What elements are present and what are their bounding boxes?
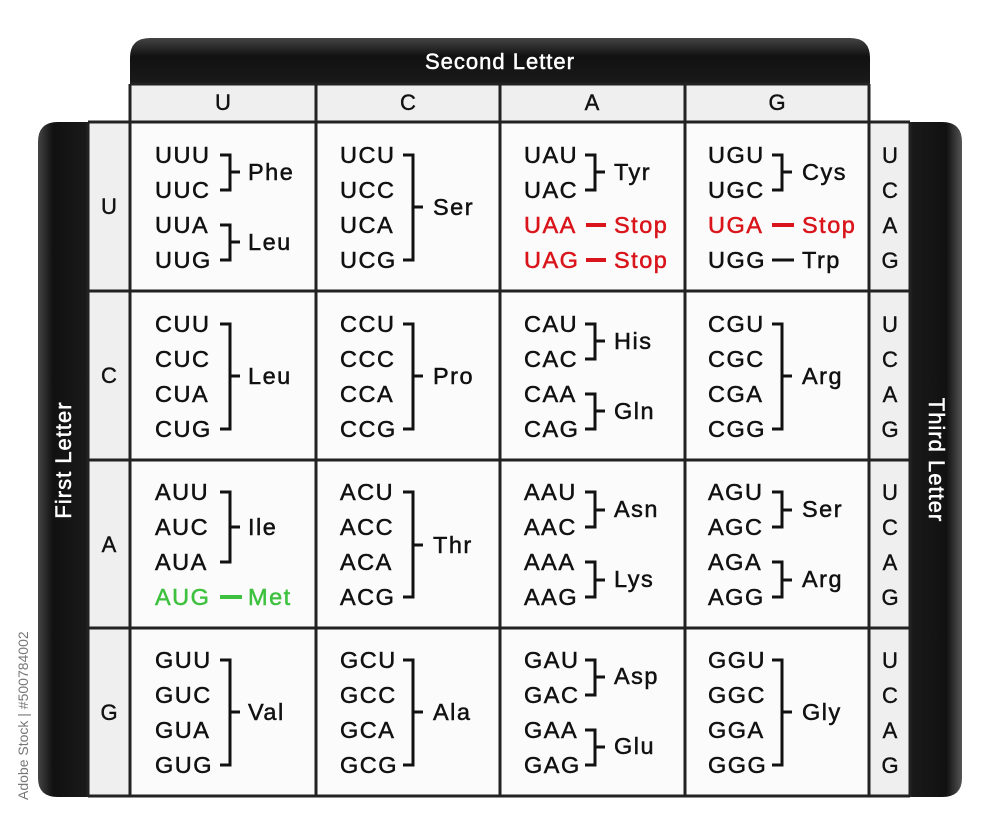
- cell UA: UAG: [524, 247, 579, 273]
- cell GA: GAG: [524, 752, 581, 778]
- cell UU: Leu: [248, 229, 292, 255]
- cell AA: Lys: [614, 566, 654, 592]
- cell AG: AGA: [708, 549, 762, 575]
- cell AC: ACA: [340, 549, 393, 575]
- cell UG: UGU: [708, 142, 765, 168]
- cell CG: CGA: [708, 381, 763, 407]
- cell CA: [524, 311, 655, 442]
- cell GG: GGA: [708, 717, 765, 743]
- grid backgrounds: [88, 84, 910, 797]
- right bar: Third Letter: [910, 122, 962, 797]
- cell AU: AUA: [155, 549, 208, 575]
- second letter headers: A: [585, 90, 600, 115]
- cell UU: [155, 142, 294, 273]
- cell UU: UUG: [155, 247, 212, 273]
- first letter labels: U: [101, 194, 117, 219]
- cell UU: Phe: [248, 159, 294, 185]
- cell GA: Asp: [614, 663, 659, 689]
- third letter labels: G: [881, 248, 899, 273]
- cell CU: [155, 311, 292, 442]
- third letter labels: U: [882, 648, 898, 673]
- second letter headers: U: [215, 90, 231, 115]
- cell GU: Val: [248, 699, 285, 725]
- cell CG: CGU: [708, 311, 765, 337]
- cell CA: CAC: [524, 346, 578, 372]
- cell AC: ACU: [340, 479, 394, 505]
- cell UC: Ser: [433, 194, 474, 220]
- cell GC: GCC: [340, 682, 397, 708]
- third letter labels: C: [882, 347, 898, 372]
- cell GU: GUU: [155, 647, 212, 673]
- cell AA: Asn: [614, 496, 659, 522]
- cell UC: UCA: [340, 212, 394, 238]
- cell AU: AUU: [155, 479, 209, 505]
- cell GG: GGG: [708, 752, 767, 778]
- third letter labels: C: [882, 178, 898, 203]
- cell AA: AAA: [524, 549, 576, 575]
- cell GU: GUA: [155, 717, 210, 743]
- cell UA: UAC: [524, 177, 578, 203]
- first letter labels: C: [101, 363, 117, 388]
- cell UU: UUC: [155, 177, 210, 203]
- cell CG: [708, 311, 843, 442]
- cell AU: AUG: [155, 584, 210, 610]
- third letter labels: G: [881, 585, 899, 610]
- third letter labels: U: [882, 480, 898, 505]
- third letter labels: C: [882, 683, 898, 708]
- second letter headers: G: [768, 90, 786, 115]
- cell CA: CAG: [524, 416, 579, 442]
- cell UC: UCU: [340, 142, 395, 168]
- cell CC: CCC: [340, 346, 395, 372]
- cell UA: [524, 142, 668, 273]
- first letter labels: [100, 194, 118, 725]
- third letter labels: A: [883, 213, 898, 238]
- cell AA: [524, 479, 659, 610]
- cell UC: UCC: [340, 177, 395, 203]
- cell AA: AAC: [524, 514, 577, 540]
- cell CU: CUU: [155, 311, 210, 337]
- cell UA: UAU: [524, 142, 578, 168]
- cell AC: ACC: [340, 514, 394, 540]
- cell CU: CUA: [155, 381, 209, 407]
- cell AG: Arg: [802, 566, 843, 592]
- cell GU: GUG: [155, 752, 213, 778]
- cell GC: GCU: [340, 647, 397, 673]
- cell AC: ACG: [340, 584, 395, 610]
- cell AG: AGC: [708, 514, 763, 540]
- cell AU: Met: [248, 584, 292, 610]
- cell UU: UUU: [155, 142, 210, 168]
- cell GC: [340, 647, 471, 778]
- cell CU: CUC: [155, 346, 210, 372]
- cell GG: GGU: [708, 647, 766, 673]
- left bar: First Letter: [38, 122, 88, 797]
- cell AG: AGU: [708, 479, 763, 505]
- cell GG: GGC: [708, 682, 766, 708]
- third letter labels: C: [882, 515, 898, 540]
- cell CU: Leu: [248, 363, 292, 389]
- cell AC: Thr: [433, 532, 473, 558]
- third letter labels: U: [882, 143, 898, 168]
- cell GC: GCA: [340, 717, 395, 743]
- cell UA: UAA: [524, 212, 577, 238]
- cell UU: UUA: [155, 212, 209, 238]
- cell GG: Gly: [802, 699, 842, 725]
- cell AU: [155, 479, 292, 610]
- cell AG: [708, 479, 843, 610]
- header bar: Second Letter: [130, 38, 870, 84]
- cell GG: [708, 647, 842, 778]
- cell CC: Pro: [433, 363, 474, 389]
- third letter labels: G: [881, 753, 899, 778]
- cell GU: [155, 647, 285, 778]
- header bar: Second Letter: Second Letter: [425, 49, 575, 74]
- cell AU: AUC: [155, 514, 209, 540]
- watermark id: Adobe Stock | #500784002: [15, 631, 31, 800]
- third letter labels: [881, 143, 899, 778]
- third letter labels: U: [882, 312, 898, 337]
- third letter labels: G: [881, 417, 899, 442]
- cell CA: CAA: [524, 381, 577, 407]
- cell CU: CUG: [155, 416, 212, 442]
- cell CC: CCG: [340, 416, 397, 442]
- cell CA: His: [614, 328, 652, 354]
- cell CC: CCA: [340, 381, 394, 407]
- cell UA: Stop: [614, 212, 668, 238]
- cell UG: UGC: [708, 177, 765, 203]
- first letter labels: A: [102, 532, 117, 557]
- third letter labels: A: [883, 382, 898, 407]
- cell GA: Glu: [614, 733, 655, 759]
- cell GA: GAC: [524, 682, 579, 708]
- cell GC: GCG: [340, 752, 398, 778]
- cell UC: [340, 142, 474, 273]
- cell GA: [524, 647, 659, 778]
- cell CG: CGG: [708, 416, 766, 442]
- cell AA: AAU: [524, 479, 577, 505]
- cell CG: Arg: [802, 363, 843, 389]
- cell AG: Ser: [802, 496, 843, 522]
- cell CA: Gln: [614, 398, 655, 424]
- cell UC: UCG: [340, 247, 397, 273]
- cell UG: [708, 142, 856, 273]
- right bar: Third Letter: Third Letter: [924, 398, 949, 522]
- third letter labels: A: [883, 550, 898, 575]
- cell UA: Stop: [614, 247, 668, 273]
- cell UG: UGG: [708, 247, 766, 273]
- cell AU: Ile: [248, 514, 277, 540]
- cell UG: Stop: [802, 212, 856, 238]
- cell UG: Trp: [802, 247, 841, 273]
- cell GA: GAA: [524, 717, 578, 743]
- grid lines: [88, 84, 910, 797]
- cell GA: GAU: [524, 647, 579, 673]
- cell UG: UGA: [708, 212, 763, 238]
- second letter headers: C: [400, 90, 416, 115]
- cell AG: AGG: [708, 584, 765, 610]
- cell AC: [340, 479, 473, 610]
- third letter labels: A: [883, 718, 898, 743]
- cell CC: CCU: [340, 311, 395, 337]
- first letter labels: G: [100, 700, 118, 725]
- cell CA: CAU: [524, 311, 578, 337]
- cell AA: AAG: [524, 584, 578, 610]
- cell GU: GUC: [155, 682, 212, 708]
- cell CG: CGC: [708, 346, 765, 372]
- cell GC: Ala: [433, 699, 471, 725]
- second letter headers: [215, 90, 786, 115]
- cell UG: Cys: [802, 159, 847, 185]
- cell CC: [340, 311, 474, 442]
- cell UA: Tyr: [614, 159, 651, 185]
- left bar: First Letter: First Letter: [51, 401, 76, 519]
